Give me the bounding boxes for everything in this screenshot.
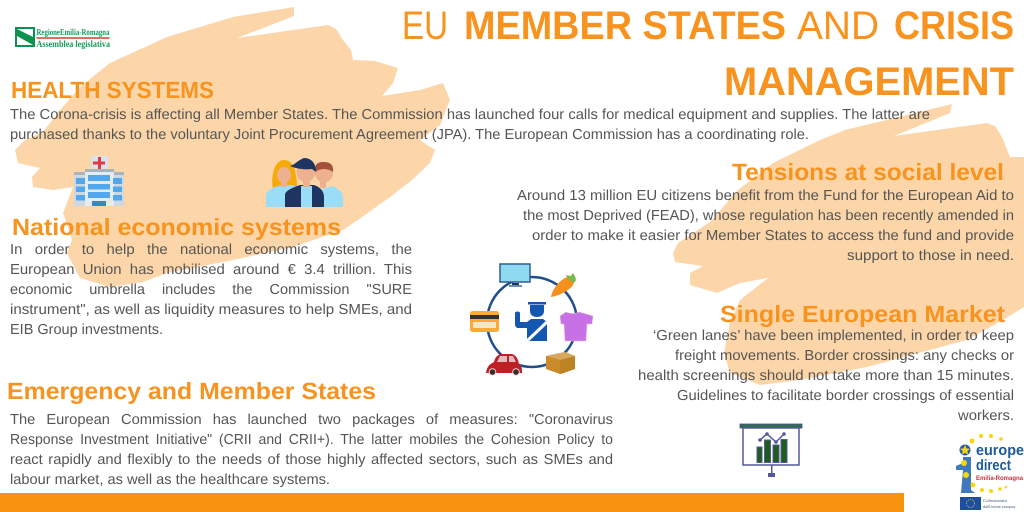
text block: emergency and member states: Response Investment Initiative" (CRII and CRII+). The latter mobiles the Cohesion Policy to bbox=[10, 432, 613, 448]
text block: single european market bbox=[638, 328, 1014, 424]
icon: border officer bbox=[515, 302, 547, 341]
text block: tensions at social level bbox=[517, 188, 1014, 264]
text block: single european market: health screenings should not take more than 15 minutes. bbox=[638, 368, 1014, 384]
text block: health systems: purchased thanks to the voluntary Joint Procurement Agreement (JPA). The European Commission has a coordinating role. bbox=[10, 127, 809, 143]
text block: health systems: The Corona-crisis is affecting all Member States. The Commission has launched four calls for medical equipment and supplies. The latter are bbox=[10, 107, 930, 123]
text block: emergency and member states bbox=[10, 412, 613, 488]
text block: emergency and member states: labour market, as well as the healthcare systems. bbox=[10, 472, 330, 488]
logo: Regione Emilia-Romagna: RegioneEmilia-Romagna bbox=[36, 27, 110, 37]
text block: national economic systems: EIB Group investments. bbox=[10, 322, 163, 338]
heading: health systems: HEALTH SYSTEMS bbox=[11, 77, 214, 103]
icon: group of people bbox=[266, 158, 343, 207]
text block: emergency and member states: react rapidly and flexibly to the needs of those highly affected sectors, such as SMEs and bbox=[10, 452, 613, 468]
brush stroke: right background bbox=[673, 104, 1024, 385]
logo: europe direct bbox=[956, 434, 1024, 510]
icon: carrot bbox=[551, 273, 576, 297]
icon: t-shirt bbox=[560, 312, 593, 341]
logo: Regione Emilia-Romagna: Assemblea legislativa bbox=[36, 40, 110, 50]
title bbox=[402, 4, 1014, 104]
icon: presentation chart bbox=[740, 424, 802, 477]
icon: car bbox=[486, 354, 522, 375]
logo: europe direct: dall'Unione europea bbox=[983, 505, 1016, 509]
text block: single european market: freight movements. Border crossings: any checks or bbox=[675, 348, 1014, 364]
title: MEMBER STATES bbox=[464, 4, 786, 48]
text block: tensions at social level: order to make it easier for Member States to access the fund and provide bbox=[532, 228, 1014, 244]
logo: europe direct: direct bbox=[976, 457, 1011, 474]
icon: hospital bbox=[74, 156, 124, 206]
text block: national economic systems: In order to help the national economic systems, the bbox=[10, 242, 412, 258]
text block: national economic systems: European Union has mobilised around € 3.4 trillion. This bbox=[10, 262, 412, 278]
logo: Regione Emilia-Romagna bbox=[15, 27, 110, 50]
heading: single european market: Single European Market bbox=[720, 301, 1005, 327]
title: AND bbox=[797, 4, 879, 48]
text block: national economic systems bbox=[10, 242, 412, 338]
icon: circular border checks diagram bbox=[470, 264, 593, 375]
text block: national economic systems: economic umbrella includes the Commission "SURE bbox=[10, 282, 412, 298]
text block: national economic systems: instrument", as well as liquidity measures to help SMEs, and bbox=[10, 302, 412, 318]
bottom orange bar bbox=[0, 493, 904, 512]
text block: tensions at social level: support to those in need. bbox=[847, 248, 1014, 264]
text block: single european market: ‘Green lanes’ have been implemented, in order to keep bbox=[653, 328, 1014, 344]
text block: health systems bbox=[10, 107, 930, 143]
heading: national economic systems: National economic systems bbox=[12, 214, 341, 240]
title: MANAGEMENT bbox=[724, 60, 1014, 104]
heading: tensions at social level: Tensions at social level bbox=[732, 159, 1004, 185]
logo: europe direct: Cofinanziato bbox=[983, 499, 1007, 503]
icon: box bbox=[546, 352, 575, 374]
icon: monitor bbox=[500, 264, 530, 287]
text block: tensions at social level: Around 13 million EU citizens benefit from the Fund for the European Aid to bbox=[517, 188, 1014, 204]
text block: tensions at social level: the most Deprived (FEAD), whose regulation has been recently amended in bbox=[523, 208, 1014, 224]
heading: emergency and member states: Emergency and Member States bbox=[7, 378, 376, 404]
text block: single european market: workers. bbox=[957, 408, 1014, 424]
icon: credit card bbox=[470, 311, 499, 332]
text block: single european market: Guidelines to facilitate border crossings of essential bbox=[677, 388, 1014, 404]
brush stroke: left background bbox=[15, 7, 450, 287]
title: EU bbox=[402, 4, 448, 48]
title: CRISIS bbox=[894, 4, 1014, 48]
text block: emergency and member states: The European Commission has launched two packages of measures: "Coronavirus bbox=[10, 412, 613, 428]
